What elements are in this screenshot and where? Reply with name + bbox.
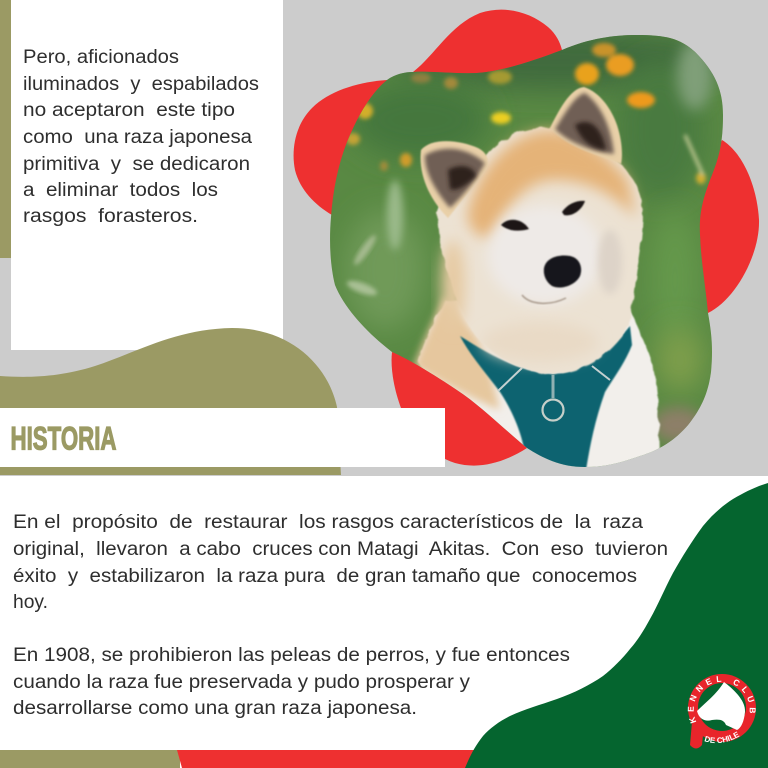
yellow and orange flowers bbox=[346, 43, 706, 184]
bottom colour strip bbox=[0, 750, 480, 768]
text block: restoration paragraph: original, llevaron a cabo cruces con Matagi Akitas. Con eso tuvieron bbox=[13, 539, 668, 560]
text block: intro paragraph: Pero, aficionados bbox=[23, 47, 179, 68]
text block: intro paragraph: primitiva y se dedicaron bbox=[23, 154, 250, 175]
olive wave behind heading bbox=[0, 328, 341, 475]
left ear bbox=[421, 141, 488, 218]
text block: restoration paragraph: hoy. bbox=[13, 592, 48, 613]
teal harness bbox=[460, 326, 632, 470]
text block: restoration paragraph bbox=[13, 512, 668, 613]
text block: restoration paragraph: éxito y estabilizaron la raza pura de gran tamaño que conocemos bbox=[13, 566, 637, 587]
text block: 1908 paragraph: En 1908, se prohibieron las peleas de perros, y fue entonces bbox=[13, 645, 570, 666]
heading: Historia: HISTORIA bbox=[10, 420, 116, 456]
right ear bbox=[550, 87, 622, 164]
logo: Kennel Club de Chile: KENNEL CLUB bbox=[688, 676, 756, 724]
text block: 1908 paragraph bbox=[13, 645, 570, 719]
red blob behind photo bbox=[294, 10, 759, 466]
meadow background bbox=[320, 25, 730, 475]
text block: intro paragraph bbox=[23, 47, 259, 227]
heading band bbox=[0, 408, 445, 467]
eyes bbox=[501, 201, 585, 231]
text block: intro paragraph: como una raza japonesa bbox=[23, 127, 252, 148]
text block: restoration paragraph: En el propósito de restaurar los rasgos característicos de la raza bbox=[13, 512, 643, 533]
dog head bbox=[421, 87, 643, 374]
dog body and harness bbox=[414, 296, 660, 480]
text block: 1908 paragraph: cuando la raza fue preservada y pudo prosperar y bbox=[13, 672, 471, 693]
text block: intro paragraph: rasgos forasteros. bbox=[23, 206, 198, 227]
text block: intro paragraph: a eliminar todos los bbox=[23, 180, 218, 201]
photo: akita dog in a flower meadow bbox=[320, 25, 730, 480]
logo: Kennel Club de Chile bbox=[688, 674, 756, 748]
text block: intro paragraph: iluminados y espabilados bbox=[23, 74, 259, 95]
panel: bottom white section bbox=[0, 476, 768, 768]
muzzle line and nose bbox=[522, 256, 581, 303]
text block: intro paragraph: no aceptaron este tipo bbox=[23, 100, 235, 121]
logo: Kennel Club de Chile: DE CHILE bbox=[704, 732, 740, 744]
text block: 1908 paragraph: desarrollarse como una gran raza japonesa. bbox=[13, 698, 417, 719]
panel: top text card bbox=[0, 0, 283, 350]
green corner wave bbox=[465, 483, 768, 768]
head fur bbox=[437, 128, 643, 374]
